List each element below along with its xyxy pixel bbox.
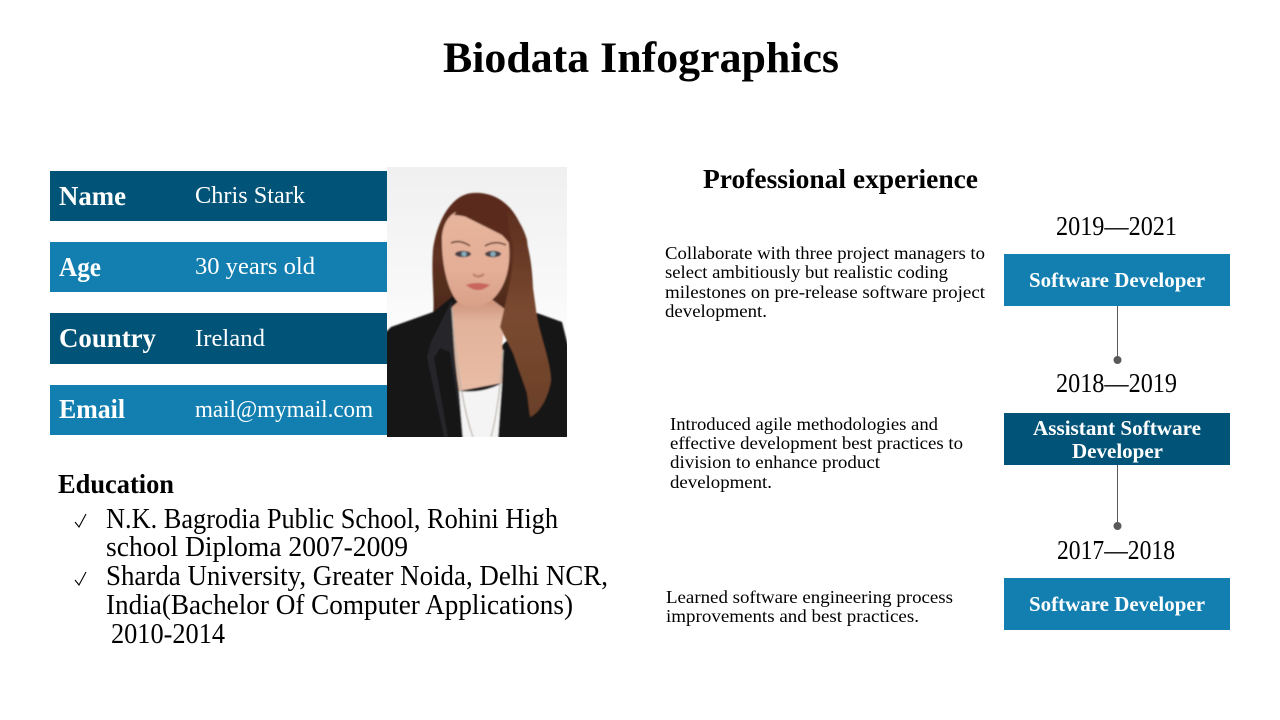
connector (1114, 465, 1122, 530)
description: 2018-2019: Introduced agile methodologies and (670, 414, 938, 434)
icon: check mark (75, 514, 86, 527)
education list (75, 504, 608, 650)
education item 2: Sharda University, Greater Noida, Delhi NCR, (106, 561, 608, 592)
description: 2018-2019: effective development best practices to (670, 433, 963, 453)
education item 2: 2010-2014 (111, 619, 225, 650)
row: email: mail@mymail.com (195, 397, 373, 423)
education item 1: school Diploma 2007-2009 (106, 532, 408, 563)
description: 2017-2018 (666, 587, 953, 626)
description: 2018-2019: development. (670, 472, 772, 492)
portrait photo (385, 167, 569, 440)
year: 2018-2019: 2018—2019 (1056, 368, 1177, 398)
role box: assistant software developer: Assistant Software (1033, 416, 1201, 440)
icon: check mark (75, 572, 86, 585)
education item 1: N.K. Bagrodia Public School, Rohini High (106, 504, 558, 535)
description: 2018-2019: division to enhance product (670, 452, 880, 472)
row: age (50, 242, 387, 292)
role box: software developer (1004, 578, 1230, 630)
row: name (50, 171, 387, 221)
heading: education: Education (58, 469, 174, 499)
year: 2019-2021: 2019—2021 (1056, 211, 1177, 241)
row: age: Age (59, 252, 101, 282)
description: 2019-2021: milestones on pre-release software project (665, 282, 985, 302)
description: 2017-2018: improvements and best practices. (666, 606, 919, 626)
heading: professional experience: Professional experience (703, 164, 978, 194)
education item 2 (106, 561, 608, 650)
panel: personal details (50, 171, 387, 435)
row: name: Chris Stark (195, 183, 305, 209)
description: 2017-2018: Learned software engineering process (666, 587, 953, 607)
role box: software developer: Software Developer (1029, 268, 1205, 292)
row: age: 30 years old (195, 254, 315, 280)
description: 2019-2021 (665, 243, 985, 321)
row: email (50, 385, 387, 435)
connector (1114, 306, 1122, 364)
description: 2019-2021: select ambitiously but realistic coding (665, 262, 948, 282)
education item 1 (106, 504, 558, 563)
education item 2: India(Bachelor Of Computer Applications) (106, 590, 573, 621)
description: 2019-2021: Collaborate with three project managers to (665, 243, 985, 263)
role box: assistant software developer (1004, 413, 1230, 465)
year: 2017-2018: 2017—2018 (1057, 535, 1175, 565)
role box: assistant software developer: Developer (1072, 439, 1163, 463)
row: country: Country (59, 323, 156, 353)
row: name: Name (59, 181, 126, 211)
role box: software developer: Software Developer (1029, 592, 1205, 616)
row: country (50, 313, 387, 364)
title: Biodata Infographics (443, 35, 839, 82)
role box: software developer (1004, 254, 1230, 306)
description: 2018-2019 (670, 414, 963, 492)
row: email: Email (59, 394, 125, 424)
row: country: Ireland (195, 326, 265, 352)
description: 2019-2021: development. (665, 301, 767, 321)
